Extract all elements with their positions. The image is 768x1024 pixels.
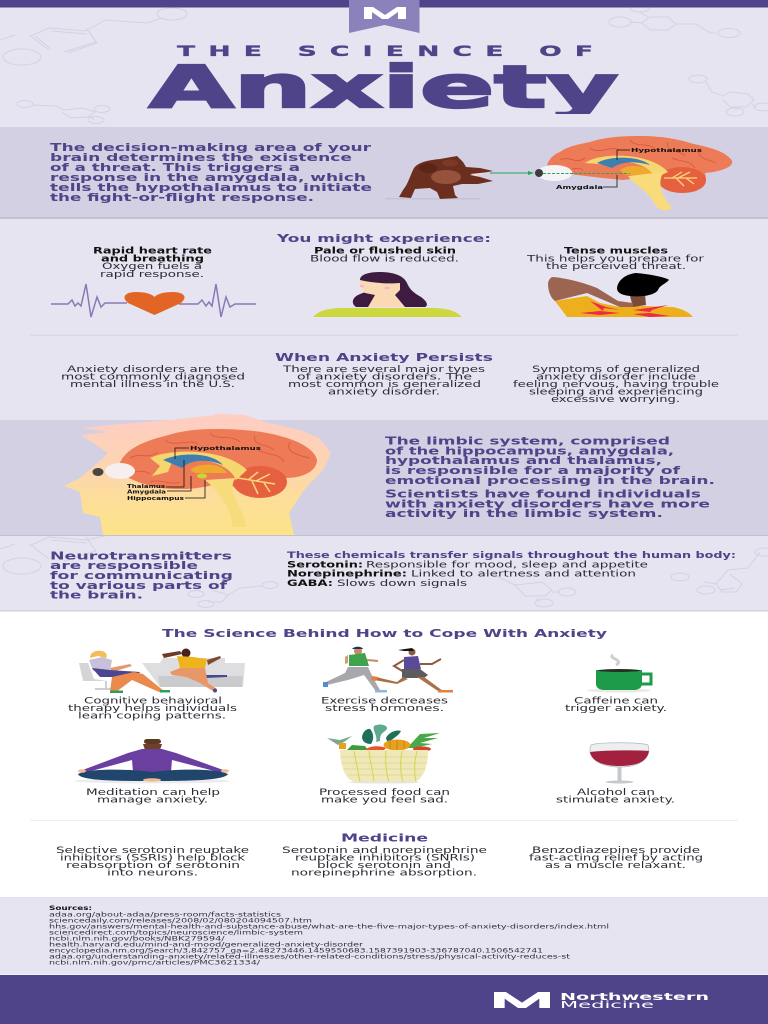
text: symptoms: excessive worrying. [551, 394, 680, 404]
item: alcohol: stimulate anxiety. [556, 795, 675, 805]
text: chemicals list: Slows down signals [337, 578, 467, 588]
text: neurotransmitters lead: are responsible [50, 559, 198, 572]
text: SSRIs: into neurons. [107, 867, 198, 877]
logo: Northwestern Medicine: Northwestern [560, 992, 709, 1003]
text: benzodiazepines: as a muscle relaxant. [545, 860, 686, 870]
arrow: threat to eye [490, 171, 534, 175]
panel: sources: ncbi.nlm.nih.gov/books/NBK279594/ [49, 936, 225, 942]
text: limbic system explanation: The limbic system, comprised [385, 434, 670, 448]
icon: therapy session [79, 648, 245, 693]
text: anxiety prevalence: most commonly diagnosed [61, 372, 245, 382]
symptom: tense muscles: the perceived threat. [546, 261, 686, 271]
icon: woman with flushed face [313, 272, 462, 317]
text: SSRIs: Selective serotonin reuptake [56, 845, 249, 855]
text: limbic system explanation: of the hippocampus, amygdala, [385, 444, 674, 458]
text: chemicals list: GABA: [287, 578, 333, 588]
text: types of anxiety disorders [281, 364, 485, 396]
text: types of anxiety disorders: most common is generalized [288, 379, 481, 389]
panel: sources: sciencedirect.com/topics/neuroscience/limbic-system [49, 930, 304, 936]
item: meditation: Meditation can help [86, 787, 220, 797]
text: SNRIs: reuptake inhibitors (SNRIs) [295, 852, 475, 862]
heading: how to cope: The Science Behind How to Cope With Anxiety [162, 627, 607, 640]
symptom: rapid heart rate: rapid response. [100, 269, 204, 279]
panel: sources: ncbi.nlm.nih.gov/pmc/articles/PMC3621334/ [49, 961, 260, 967]
title [146, 45, 619, 114]
item: processed food [319, 725, 450, 805]
illustration: head with limbic system [64, 414, 331, 535]
item: processed food: make you feel sad. [321, 795, 448, 805]
illustration: head with limbic system: Hypothalamus [190, 446, 262, 452]
symptom: pale or flushed skin [310, 246, 462, 317]
panel: sources: Sources: [49, 906, 92, 912]
item: cognitive behavioral therapy: therapy helps individuals [68, 703, 237, 713]
heading: when anxiety persists: When Anxiety Persists [275, 351, 493, 364]
top bar [0, 0, 768, 8]
icon: person with neck pain [548, 273, 693, 317]
text: SSRIs: reabsorption of serotonin [66, 860, 240, 870]
symptom: pale or flushed skin: Pale or flushed skin [314, 246, 456, 256]
text: chemicals list: These chemicals transfer signals throughout the human body: [287, 550, 736, 560]
logo tag [349, 0, 420, 33]
threat response text: The decision-making area of your [50, 141, 372, 154]
panel: footer [0, 975, 768, 1024]
panel: neurotransmitters [0, 536, 768, 612]
threat response text: response in the amygdala, which [50, 171, 366, 184]
icon: food basket [327, 725, 440, 784]
illustration: head with limbic system: Amygdala [127, 490, 166, 496]
illustration: head with limbic system: Hippocampus [127, 496, 185, 502]
symptom: rapid heart rate [51, 246, 256, 317]
logo: Northwestern Medicine: Medicine [560, 1000, 654, 1011]
text: limbic system explanation: Scientists have found individuals [385, 488, 701, 500]
symptom: rapid heart rate: and breathing [101, 253, 204, 263]
panel: sources [0, 897, 768, 974]
item: exercise [321, 647, 453, 713]
text: limbic system explanation: with anxiety disorders have more [385, 498, 710, 510]
symptom: tense muscles: Tense muscles [564, 246, 668, 256]
logo: Northwestern Medicine [494, 992, 709, 1011]
text: symptoms: Symptoms of generalized [532, 364, 700, 374]
item: meditation [74, 739, 230, 805]
panel: sources: sciencedaily.com/releases/2008/02/080204094507.htm [49, 918, 313, 924]
text: neurotransmitters lead: for communicating [50, 569, 233, 582]
item: processed food: Processed food can [319, 787, 450, 797]
item: alcohol: Alcohol can [577, 787, 655, 797]
symptom: tense muscles: This helps you prepare for [525, 253, 705, 263]
item: exercise: Exercise decreases [321, 696, 448, 706]
heading: you might experience: You might experience: [275, 232, 491, 245]
panel: sources: hhs.gov/answers/mental-health-and-substance-abuse/what-are-the-five-major-types-of-anxiety-disorders/index.html [49, 924, 610, 930]
heading: medicine: Medicine [341, 832, 428, 844]
panel: threat response [0, 127, 768, 219]
threat response text: the fight-or-flight response. [50, 191, 314, 204]
title: Anxiety [149, 53, 618, 121]
text: benzodiazepines [529, 845, 703, 870]
text: types of anxiety disorders: anxiety disorder. [328, 386, 440, 396]
brain diagram: amygdala and hypothalamus: Amygdala [556, 185, 603, 191]
item: cognitive behavioral therapy: learn coping patterns. [78, 710, 226, 720]
brain diagram: amygdala and hypothalamus: Hypothalamus [631, 148, 703, 154]
icon: wine glass [590, 743, 649, 784]
text: SNRIs: Serotonin and norepinephrine [282, 845, 487, 855]
icon: runners [323, 647, 453, 692]
text: chemicals list: Responsible for mood, sleep and appetite [366, 559, 648, 569]
text: types of anxiety disorders: There are several major types [281, 364, 485, 374]
text: SNRIs: block serotonin and [317, 860, 451, 870]
illustration: head with limbic system: Thalamus [127, 484, 166, 490]
item: meditation: manage anxiety. [97, 795, 208, 805]
text: SSRIs [56, 845, 249, 877]
text: limbic system explanation: is responsible for a majority of [385, 464, 680, 477]
item: alcohol [556, 743, 675, 805]
text: neurotransmitters lead: Neurotransmitters [50, 550, 232, 562]
text: chemicals list: Serotonin: [287, 559, 363, 569]
text: symptoms [513, 364, 719, 404]
panel: sources: adaa.org/understanding-anxiety/related-illnesses/other-related-conditions/stress/physical-activity-reduces-st [49, 955, 571, 961]
text: chemicals list: Linked to alertness and attention [411, 569, 636, 579]
icon: heartbeat [51, 284, 256, 317]
text: limbic system explanation: hypothalamus and thalamus, [385, 454, 662, 467]
item: cognitive behavioral therapy [68, 648, 245, 720]
item: caffeine [565, 655, 667, 713]
text: limbic system explanation [385, 434, 715, 520]
icon: bear [385, 156, 493, 200]
text: neurotransmitters lead: to various parts of [50, 579, 227, 592]
icon: meditating man [74, 739, 230, 784]
symptom: rapid heart rate: Oxygen fuels a [102, 261, 202, 271]
text: anxiety prevalence [61, 364, 245, 389]
text: SSRIs: inhibitors (SSRIs) help block [60, 852, 245, 862]
text: limbic system explanation: emotional processing in the brain. [385, 474, 715, 487]
text: SNRIs [282, 845, 487, 877]
title: THE SCIENCE OF [177, 43, 593, 60]
text: anxiety prevalence: mental illness in the U.S. [70, 379, 235, 389]
item: cognitive behavioral therapy: Cognitive behavioral [84, 696, 222, 706]
text: limbic system explanation: activity in the limbic system. [385, 507, 663, 520]
text: chemicals list: Norepinephrine: [287, 569, 407, 579]
text: benzodiazepines: fast-acting relief by acting [529, 852, 703, 862]
threat response text: of a threat. This triggers a [50, 161, 300, 174]
text: neurotransmitters lead: the brain. [50, 588, 143, 602]
threat response text [50, 141, 372, 204]
brain diagram: amygdala and hypothalamus [535, 136, 732, 210]
symptom: tense muscles [525, 246, 705, 317]
text: symptoms: sleeping and experiencing [529, 386, 703, 396]
symptom: pale or flushed skin: Blood flow is reduced. [310, 253, 459, 263]
text: types of anxiety disorders: of anxiety disorders. The [297, 372, 472, 382]
icon: coffee cup [587, 655, 651, 692]
panel: limbic system [0, 414, 768, 536]
text: symptoms: anxiety disorder include [536, 372, 696, 382]
item: exercise: stress hormones. [325, 703, 444, 713]
text: chemicals list [287, 550, 736, 588]
text: benzodiazepines: Benzodiazepines provide [532, 845, 700, 855]
text: anxiety prevalence: Anxiety disorders are the [67, 364, 238, 374]
item: caffeine: Caffeine can [574, 696, 658, 706]
threat response text: tells the hypothalamus to initiate [50, 181, 372, 194]
item: caffeine: trigger anxiety. [565, 703, 667, 713]
threat response text: brain determines the existence [50, 151, 352, 164]
panel: sources: health.harvard.edu/mind-and-mood/generalized-anxiety-disorder [49, 942, 364, 948]
text: SNRIs: norepinephrine absorption. [291, 867, 477, 877]
symptom: rapid heart rate: Rapid heart rate [93, 246, 212, 256]
text: symptoms: feeling nervous, having trouble [513, 379, 719, 389]
text: neurotransmitters lead [50, 550, 233, 602]
panel: sources: adaa.org/about-adaa/press-room/facts-statistics [49, 912, 281, 918]
panel: sources: encyclopedia.nm.org/Search/3,842757_ga=2.48273446.1459550683.1587391903-336787040.1506542741 [49, 948, 544, 954]
